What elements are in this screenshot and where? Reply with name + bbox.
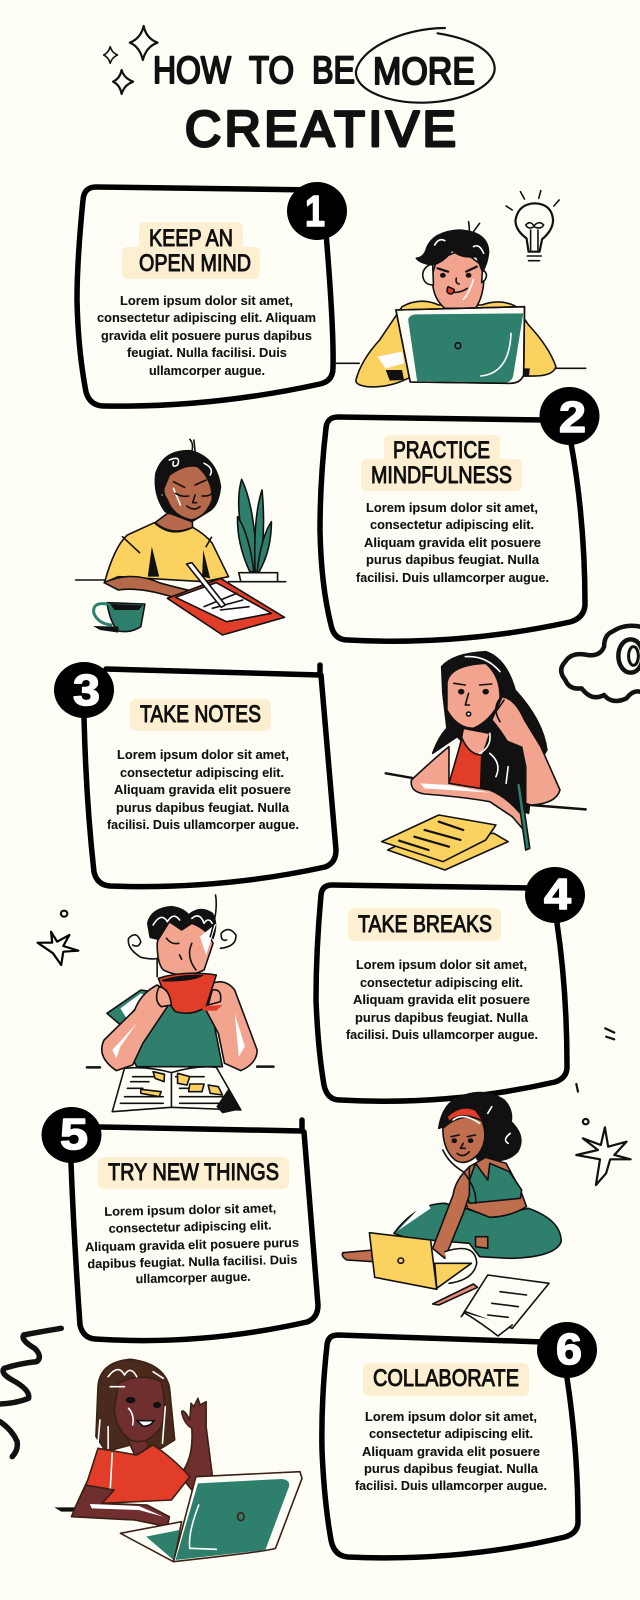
body text: Aliquam gravida elit posuere [114, 783, 291, 797]
heading: keep an open mind [122, 222, 260, 279]
body text: Lorem ipsum dolor sit amet, [104, 1201, 276, 1219]
body text: facilisi. Duis ullamcorper augue. [107, 818, 299, 832]
number badge 6 [537, 1322, 597, 1378]
title: CREATIVE [185, 101, 456, 157]
panel: step 4 [316, 867, 585, 1101]
box outline [84, 665, 336, 887]
body text: purus dapibus feugiat. Nulla [355, 1011, 529, 1025]
body text: Lorem ipsum dolor sit amet, [120, 294, 293, 308]
number 2: 2 [559, 393, 586, 442]
heading: practice mindfulness: PRACTICE [393, 437, 490, 464]
body text: purus dapibus feugiat. Nulla [366, 553, 540, 567]
body text [356, 501, 549, 585]
number badge 2 [540, 387, 600, 445]
box outline [320, 417, 585, 641]
decoration: star right with dot and marks [576, 1028, 631, 1185]
number 4: 4 [544, 870, 572, 919]
body text: consectetur adipiscing elit. [360, 976, 523, 990]
heading: practice mindfulness: MINDFULNESS [371, 462, 512, 489]
body text: facilisi. Duis ullamcorper augue. [356, 571, 549, 585]
title: BE [312, 50, 355, 92]
body text: consectetur adipiscing elit. [370, 518, 534, 532]
body text: facilisi. Duis ullamcorper augue. [346, 1028, 538, 1042]
heading: take notes: TAKE NOTES [140, 701, 261, 728]
body text: Lorem ipsum dolor sit amet, [365, 1410, 537, 1424]
heading: keep an open mind: KEEP AN [149, 225, 233, 252]
box outline [322, 1335, 578, 1558]
body text: consectetur adipiscing elit. [108, 1218, 272, 1236]
number badge 3 [54, 662, 114, 718]
title: HOW [153, 50, 231, 92]
illustration: woman sitting with yellow laptop [342, 1093, 561, 1336]
title: MORE [373, 51, 475, 93]
title ellipse and sparkles [104, 26, 495, 103]
number 5: 5 [60, 1110, 88, 1159]
number 3: 3 [73, 666, 100, 715]
number badge 1 [287, 182, 347, 240]
illustration: man sipping coffee with book [87, 895, 273, 1113]
body text: Aliquam gravida elit posuere [362, 1445, 540, 1459]
body text: consectetur adipiscing elit. [120, 766, 284, 780]
decoration: scribbled cloud [561, 626, 640, 701]
panel: step 2 [320, 387, 600, 641]
panel: step 6 [322, 1322, 597, 1558]
body text [346, 958, 538, 1042]
heading: practice mindfulness [361, 435, 522, 491]
body text: Lorem ipsum dolor sit amet, [117, 748, 289, 762]
number 6: 6 [556, 1325, 582, 1374]
body text [97, 294, 316, 378]
body text [355, 1410, 547, 1493]
box outline [71, 1120, 318, 1341]
illustration: woman writing on tablet [76, 439, 286, 635]
panel: step 3 [54, 662, 336, 887]
body text [107, 748, 299, 832]
body text: consectetur adipiscing elit. Aliquam [97, 311, 316, 325]
body text: Lorem ipsum dolor sit amet, [356, 958, 527, 972]
panel: step 1 [77, 182, 347, 406]
decoration: scribble bottom left [0, 1328, 61, 1457]
body text: Aliquam gravida elit posuere [353, 993, 530, 1007]
decoration: star left with dot [38, 911, 78, 965]
box outline [77, 187, 333, 406]
title: TO [249, 50, 294, 92]
heading: collaborate: COLLABORATE [373, 1365, 519, 1392]
illustration: woman waving at laptop [54, 1359, 302, 1562]
body text: feugiat. Nulla facilisi. Duis [127, 346, 287, 360]
panel: step 5 [42, 1107, 318, 1341]
title [153, 50, 475, 157]
body text: ullamcorper augue. [136, 1270, 251, 1286]
body text: Aliquam gravida elit posuere [364, 536, 541, 550]
body text: consectetur adipiscing elit. [369, 1427, 533, 1441]
heading: take breaks [348, 908, 501, 941]
heading: keep an open mind: OPEN MIND [139, 250, 251, 277]
body text: Aliquam gravida elit posuere purus [85, 1236, 299, 1254]
number 1: 1 [305, 187, 325, 236]
body text: purus dapibus feugiat. Nulla [364, 1462, 539, 1476]
illustration: woman thinking over notes [382, 652, 586, 870]
body text: facilisi. Duis ullamcorper augue. [355, 1479, 547, 1493]
body text: dapibus feugiat. Nulla facilisi. Duis [87, 1253, 298, 1271]
heading: try new things: TRY NEW THINGS [108, 1159, 279, 1186]
number badge 4 [525, 867, 585, 923]
heading: take breaks: TAKE BREAKS [358, 911, 492, 938]
body text [84, 1201, 300, 1287]
icon: light bulb [506, 191, 559, 261]
box outline [316, 885, 567, 1101]
body text: Lorem ipsum dolor sit amet, [366, 501, 538, 515]
illustration: man at green laptop [335, 222, 586, 387]
number badge 5 [42, 1107, 102, 1163]
body text: ullamcorper augue. [149, 364, 265, 378]
body text: gravida elit posuere purus dapibus [101, 329, 312, 343]
body text: purus dapibus feugiat. Nulla [116, 801, 290, 815]
